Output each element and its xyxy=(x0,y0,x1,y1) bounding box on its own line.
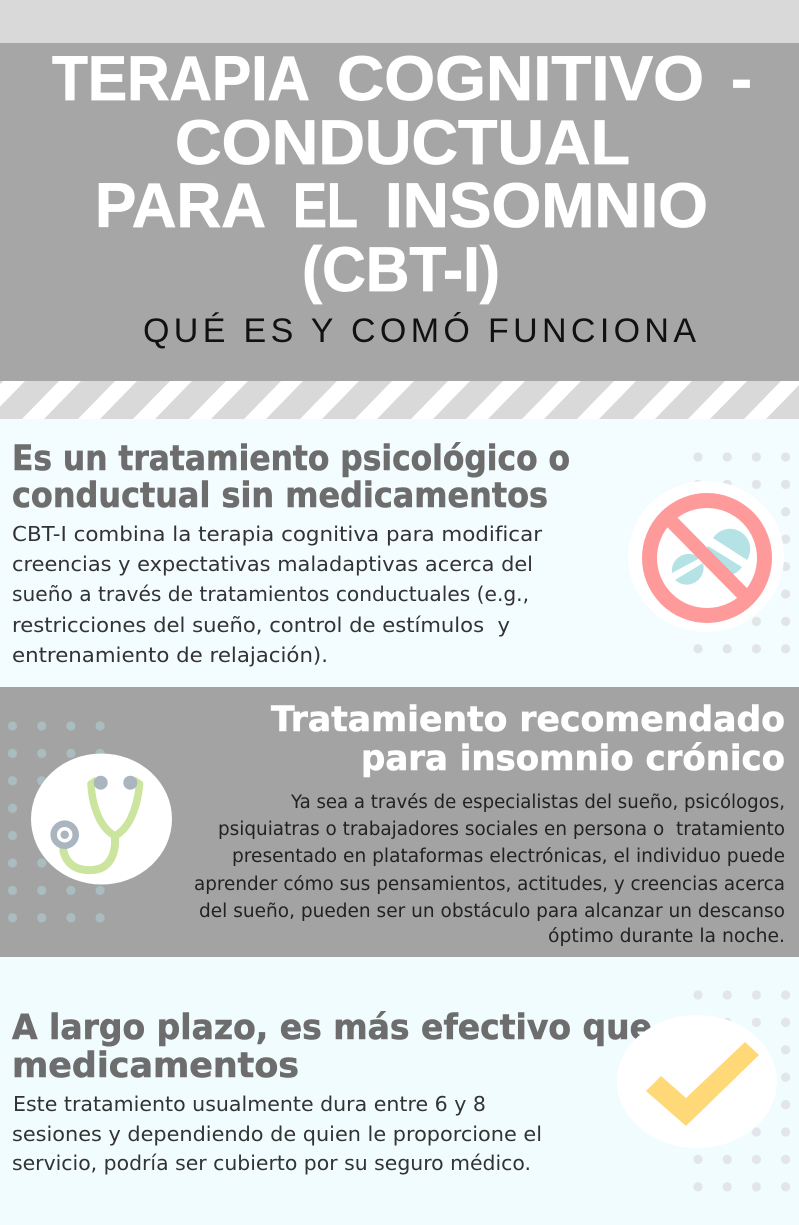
heading: conductual sin medicamentos xyxy=(12,476,548,516)
top band xyxy=(0,0,799,43)
body text: Ya sea a través de especialistas del sueño, psicólogos, xyxy=(290,792,785,813)
body text: CBT-I combina la terapia cognitiva para modificar xyxy=(12,522,543,546)
heading: Tratamiento recomendado xyxy=(271,700,785,740)
main title: - xyxy=(731,44,752,114)
heading: A largo plazo, es más efectivo que xyxy=(12,1008,652,1048)
body text: creencias y expectativas maladaptivas acerca del xyxy=(12,552,533,576)
body text: óptimo durante la noche. xyxy=(548,926,785,947)
body text: entrenamiento de relajación). xyxy=(12,643,328,667)
heading: para insomnio crónico xyxy=(361,739,785,779)
main title: TERAPIA xyxy=(52,44,310,114)
body text: aprender cómo sus pensamientos, actitudes, y creencias acerca xyxy=(194,874,785,895)
body text xyxy=(12,522,543,667)
dot pattern xyxy=(683,443,799,665)
body text xyxy=(194,792,785,947)
body text: sesiones y dependiendo de quien le proporcione el xyxy=(12,1122,542,1146)
subtitle: QUÉ ES Y COMÓ FUNCIONA xyxy=(143,312,696,350)
body text: del sueño, pueden ser un obstáculo para alcanzar un descanso xyxy=(199,901,785,922)
panel: sin medicamentos xyxy=(0,419,799,687)
main title: COGNITIVO xyxy=(337,44,704,114)
icon: no pills xyxy=(628,481,784,632)
heading xyxy=(12,439,570,516)
body text xyxy=(12,1092,542,1175)
main title: INSOMNIO xyxy=(385,171,708,241)
body text: Este tratamiento usualmente dura entre 6 y 8 xyxy=(13,1092,486,1116)
striped divider xyxy=(0,381,799,419)
main title: (CBT-I) xyxy=(302,235,500,305)
main title xyxy=(52,44,752,305)
icon: stethoscope xyxy=(31,754,172,884)
dot pattern xyxy=(0,712,116,934)
panel: tratamiento recomendado xyxy=(0,687,799,957)
icon: check mark xyxy=(617,1015,777,1148)
title panel xyxy=(0,43,799,381)
main title: CONDUCTUAL xyxy=(175,108,630,178)
body text: sueño a través de tratamientos conductuales (e.g., xyxy=(12,582,529,606)
heading xyxy=(271,700,785,779)
heading: medicamentos xyxy=(12,1046,299,1086)
body text: servicio, podría ser cubierto por su seguro médico. xyxy=(12,1151,531,1175)
main title: PARA xyxy=(95,171,266,241)
main title: EL xyxy=(293,171,358,241)
heading: Es un tratamiento psicológico o xyxy=(12,439,570,479)
dot pattern xyxy=(683,981,799,1203)
body text: presentado en plataformas electrónicas, el individuo puede xyxy=(232,846,785,867)
heading xyxy=(12,1008,652,1086)
panel: largo plazo xyxy=(0,957,799,1225)
body text: restricciones del sueño, control de estímulos y xyxy=(12,613,510,637)
body text: psiquiatras o trabajadores sociales en persona o tratamiento xyxy=(218,819,785,840)
